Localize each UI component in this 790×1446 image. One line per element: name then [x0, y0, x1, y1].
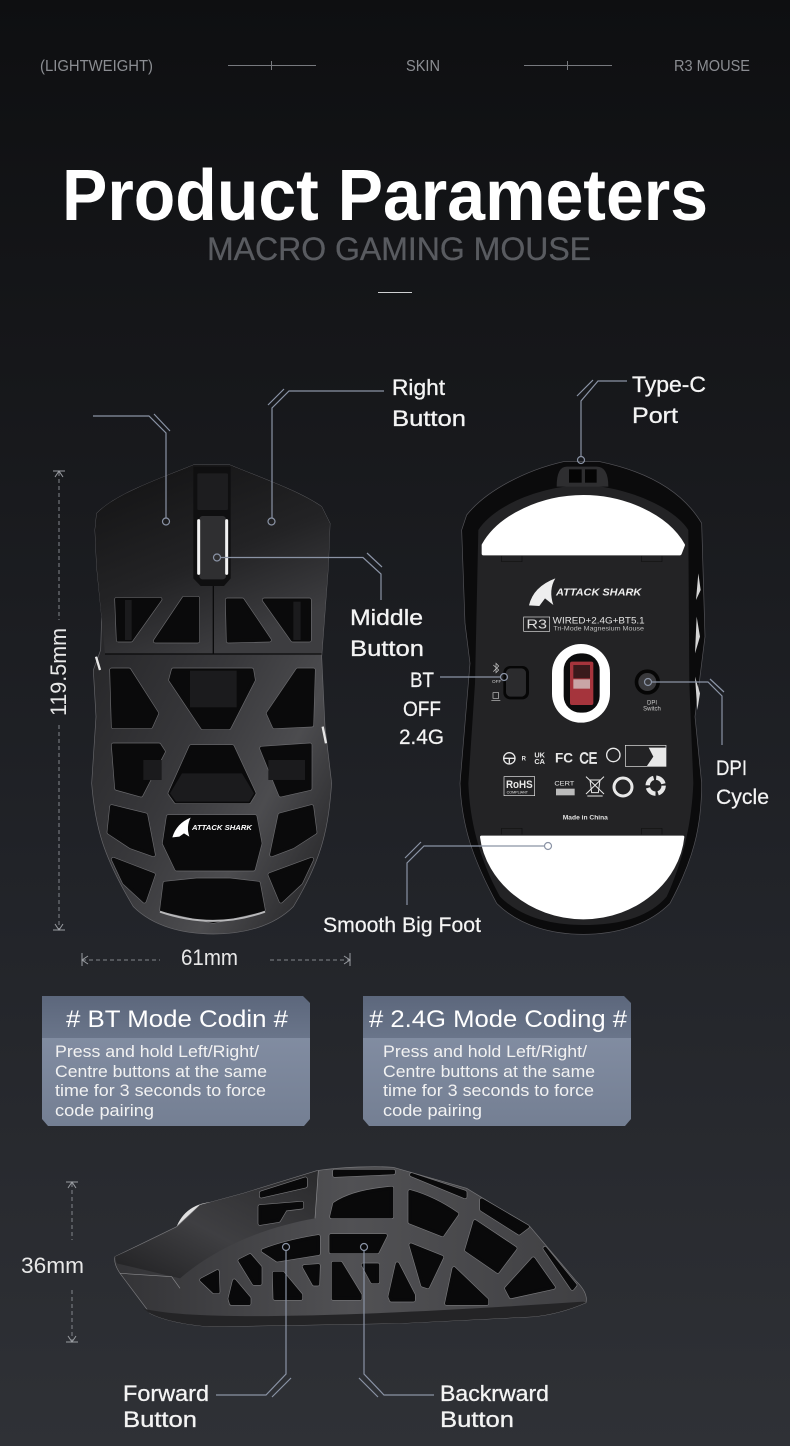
certification marks row 2: RoHS [506, 779, 533, 791]
certification marks row 1: FC [555, 750, 573, 766]
side highlights [96, 657, 326, 743]
top navigation strip [40, 58, 750, 75]
type-c port [557, 467, 608, 487]
certification marks row 2 [504, 777, 664, 796]
label: right button: Right [392, 375, 445, 400]
top navigation strip: (LIGHTWEIGHT) [40, 58, 153, 75]
panel heading: # 2.4G Mode Coding # [369, 1006, 628, 1033]
top navigation strip: SKIN [406, 58, 440, 75]
dpi key [197, 473, 228, 510]
mode switch [503, 666, 529, 699]
mouse body [115, 1167, 586, 1327]
panel body: Centre buttons at the same [55, 1062, 267, 1081]
label: type-c port: Type-C [632, 372, 706, 397]
label: middle button: Middle [350, 605, 423, 630]
R3 badge: R3 [526, 618, 547, 632]
label: type-c port: Port [632, 403, 678, 428]
dpi label [643, 700, 661, 712]
scroll wheel [176, 1202, 233, 1228]
panel body: Centre buttons at the same [383, 1062, 595, 1081]
logo wordmark: ATTACK SHARK [555, 588, 642, 599]
dpi label: Switch [643, 706, 661, 712]
panel body: time for 3 seconds to force [383, 1081, 594, 1100]
openings [202, 1171, 575, 1303]
panel: 2.4g mode coding [363, 996, 631, 1126]
certification marks row 2: CERT [554, 781, 575, 787]
R3 badge [524, 617, 550, 632]
label: right button: Button [392, 406, 466, 431]
label: mode switch: BT [410, 669, 434, 692]
mouse body [92, 465, 332, 934]
label: mode switch: 2.4G [399, 726, 444, 749]
logo plate [172, 818, 253, 837]
panel body: Press and hold Left/Right/ [383, 1042, 587, 1061]
port openings [569, 469, 582, 483]
certification marks row 1 [504, 745, 666, 767]
label: mode switch: OFF [403, 698, 441, 721]
mouse body [460, 462, 705, 934]
label: middle button: Button [350, 636, 424, 661]
width value: 61mm [181, 945, 238, 970]
rim highlight [160, 912, 265, 921]
label: dpi cycle: Cycle [716, 786, 769, 809]
title: Product Parameters [62, 156, 708, 236]
thickness value: 36mm [21, 1253, 84, 1278]
dpi label: DPI [647, 700, 657, 706]
subtitle: MACRO GAMING MOUSE [207, 231, 591, 267]
base plate [468, 485, 693, 925]
panel body: code pairing [383, 1101, 482, 1120]
label: backward button: Backrward [440, 1381, 549, 1406]
top view mouse [92, 465, 332, 934]
lattice openings [109, 598, 315, 921]
bottom glide foot [481, 837, 683, 918]
button seams [105, 582, 322, 654]
dpi button [635, 669, 660, 695]
side view mouse [115, 1167, 586, 1327]
top navigation strip: R3 MOUSE [674, 58, 750, 75]
switch icons [491, 663, 501, 701]
top buttons [95, 465, 330, 653]
port housing [557, 467, 608, 487]
callout lines [93, 380, 724, 1397]
panel body: code pairing [55, 1101, 154, 1120]
sensor ring [552, 644, 610, 723]
panel: bt mode coding [42, 996, 310, 1126]
panel body: time for 3 seconds to force [55, 1081, 266, 1100]
title rule [378, 292, 412, 293]
certification marks row 2: COMPLIANT [507, 791, 529, 795]
logo mark [172, 818, 191, 837]
label: dpi cycle: DPI [716, 757, 747, 780]
label: backward button: Button [440, 1407, 514, 1432]
logo wordmark: ATTACK SHARK [191, 823, 253, 832]
panel body: Press and hold Left/Right/ [55, 1042, 259, 1061]
inner mechanism shading [125, 600, 305, 802]
dimension: thickness [21, 1182, 84, 1342]
model text: WIRED+2.4G+BT5.1 [553, 616, 645, 626]
front button [115, 1171, 318, 1278]
logo mark [529, 578, 555, 606]
switch icons: OFF [492, 679, 501, 684]
base shadow [143, 1302, 586, 1327]
front seam highlight [120, 1171, 318, 1288]
panel heading: # BT Mode Codin # [66, 1006, 289, 1033]
top glide foot [483, 497, 683, 554]
scroll wheel housing [193, 467, 231, 586]
right side openings [695, 573, 701, 710]
sensor well [564, 653, 600, 713]
height value: 119.5mm [46, 628, 71, 716]
made in china: Made in China [563, 815, 608, 822]
wheel highlights [199, 521, 227, 573]
model subtitle: Tri-Mode Magnesium Mouse [553, 626, 645, 633]
dimension: width [82, 945, 350, 970]
bottom view mouse [460, 462, 705, 934]
certification marks row 1: UK [534, 751, 546, 760]
certification marks row 1: CA [534, 757, 546, 766]
dimension: height [46, 471, 71, 930]
scroll wheel [199, 516, 226, 579]
sensor lens [570, 662, 593, 705]
foot tabs [502, 556, 662, 834]
certification marks row 1: R [522, 757, 527, 763]
certification marks row 1: CE [579, 750, 597, 767]
label: forward button: Button [123, 1407, 197, 1432]
label: forward button: Forward [123, 1381, 209, 1406]
label: smooth big foot: Smooth Big Foot [323, 914, 481, 937]
